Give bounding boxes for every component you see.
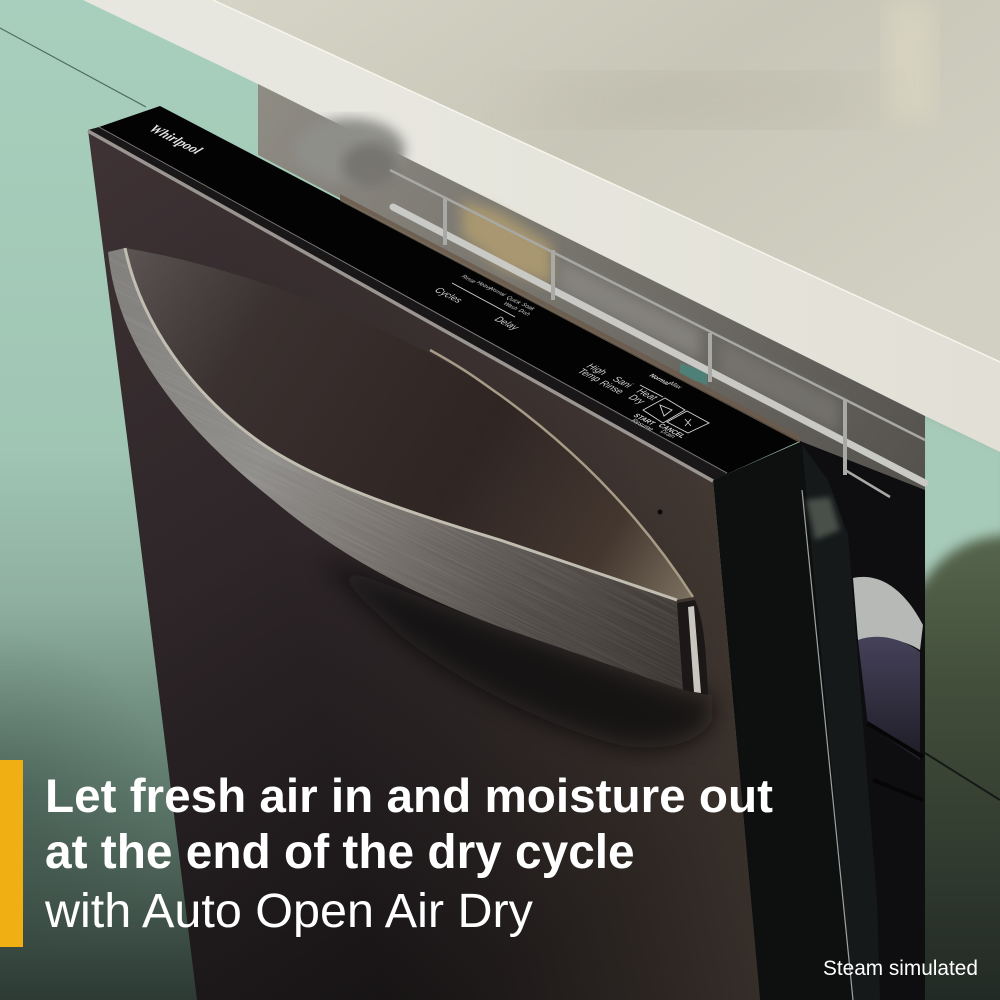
handle bbox=[108, 248, 708, 695]
door top control panel bbox=[88, 106, 800, 481]
control labels: START bbox=[631, 413, 657, 427]
control labels: Resume bbox=[629, 418, 655, 433]
control labels: High bbox=[584, 362, 609, 377]
control labels: Cycles bbox=[432, 286, 465, 305]
control labels: Quick bbox=[504, 295, 523, 306]
control labels: Rinse bbox=[459, 274, 477, 285]
control labels: CANCEL bbox=[656, 423, 686, 440]
headline: with Auto Open Air Dry bbox=[45, 884, 533, 938]
door front panel bbox=[88, 130, 760, 1000]
control labels: Heat bbox=[634, 387, 660, 403]
control labels: Temp bbox=[575, 367, 603, 384]
control labels: Dry bbox=[626, 393, 648, 407]
control labels: Max bbox=[667, 381, 684, 391]
control labels: Normal bbox=[487, 286, 507, 298]
door black side edge bbox=[713, 442, 880, 1000]
control labels: Normal bbox=[647, 373, 672, 387]
handle shadow bbox=[320, 560, 713, 748]
right cabinet bbox=[925, 416, 1000, 1000]
brand logo: Whirlpool bbox=[146, 122, 206, 157]
sensor hole bbox=[658, 510, 662, 514]
control labels: Soak bbox=[519, 302, 536, 312]
start and cancel buttons bbox=[452, 283, 709, 433]
headline: at the end of the dry cycle bbox=[45, 826, 635, 879]
handle end cap bbox=[677, 600, 708, 695]
control labels: Delay bbox=[492, 315, 522, 333]
control labels: Sani bbox=[610, 375, 635, 390]
dishwasher interior and rack bbox=[258, 84, 925, 1000]
rack wires bbox=[390, 170, 925, 497]
control labels: Drain bbox=[658, 429, 677, 440]
control labels: Heavy bbox=[474, 280, 494, 292]
headline bbox=[44, 770, 773, 938]
control labels bbox=[432, 274, 686, 440]
headline: Let fresh air in and moisture out bbox=[45, 770, 773, 823]
countertop bbox=[83, 0, 1000, 452]
control labels: Wash bbox=[501, 301, 519, 312]
disclaimer: Steam simulated bbox=[823, 957, 978, 980]
control labels: Dish bbox=[516, 308, 531, 317]
accent bar bbox=[0, 760, 23, 947]
dishes bbox=[853, 577, 923, 650]
control labels: Rinse bbox=[597, 379, 626, 396]
